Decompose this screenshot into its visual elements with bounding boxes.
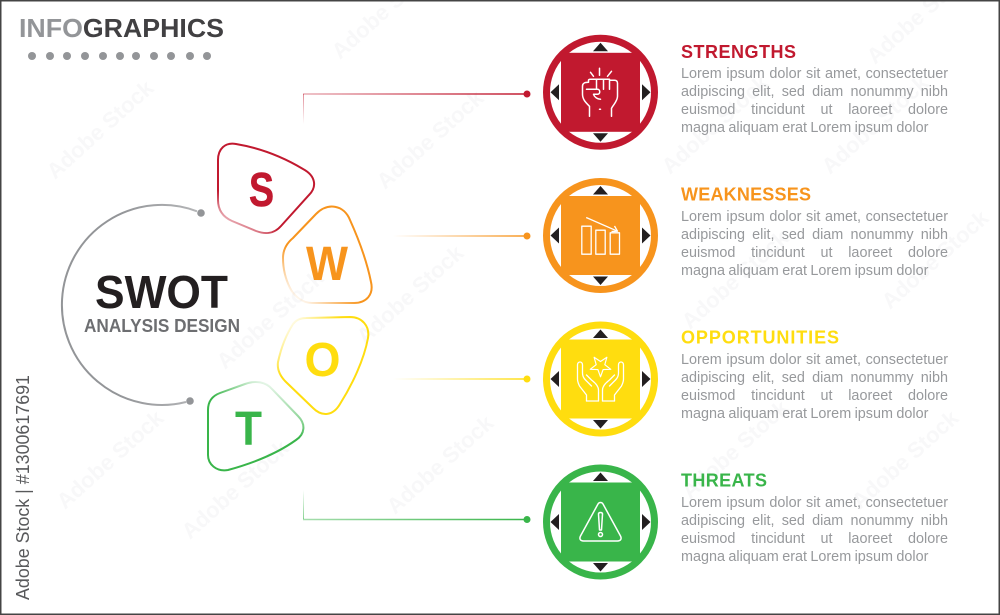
petal: S: [218, 144, 314, 233]
watermark: stock pattern: Adobe Stock: [177, 435, 294, 544]
title: INFOGRAPHICS: [19, 13, 224, 60]
watermark: stock pattern: Adobe Stock: [382, 410, 499, 519]
title dots: [28, 52, 211, 60]
text block: weaknesses: Lorem ipsum dolor sit amet, consectetuer: [681, 209, 948, 225]
subheading: analysis design: ANALYSIS DESIGN: [84, 315, 240, 336]
petal: S: S: [249, 164, 274, 217]
petal: W: W: [306, 238, 349, 291]
petal: T: [208, 382, 303, 470]
watermark: stock pattern: Adobe Stock: [657, 70, 774, 179]
connector: weaknesses: [393, 232, 530, 240]
watermark: stock pattern: Adobe Stock: [817, 70, 934, 179]
icon: falling bar chart: [582, 218, 620, 254]
heading: opportunities: OPPORTUNITIES: [681, 328, 839, 348]
watermark: stock pattern: Adobe Stock: [677, 225, 794, 334]
watermark: stock pattern: Adobe Stock: [352, 240, 469, 349]
watermark: stock pattern: Adobe Stock: [52, 405, 169, 514]
watermark: stock pattern: Adobe Stock: [42, 75, 159, 184]
text block: weaknesses: adipiscing elit, sed diam nonummy nibh: [681, 227, 948, 243]
text block: strengths: euismod tincidunt ut laoreet dolore: [681, 102, 948, 118]
icon: warning triangle: [580, 502, 621, 541]
text block: strengths: adipiscing elit, sed diam nonummy nibh: [681, 84, 948, 100]
badge: weaknesses: [546, 182, 654, 290]
text block: strengths: Lorem ipsum dolor sit amet, consectetuer: [681, 66, 948, 82]
connector: threats: [303, 490, 530, 523]
text block: opportunities: adipiscing elit, sed diam nonummy nibh: [681, 370, 948, 386]
text block: threats: euismod tincidunt ut laoreet dolore: [681, 531, 948, 547]
watermark: stock pattern: Adobe Stock: [372, 85, 489, 194]
heading: strengths: STRENGTHS: [681, 42, 796, 62]
text block: opportunities: [681, 352, 948, 422]
text block: weaknesses: [681, 209, 948, 279]
watermark: stock pattern: Adobe Stock: [847, 405, 964, 514]
badge: threats: [546, 468, 654, 576]
watermark: stock pattern: Adobe Stock: [677, 395, 794, 504]
text block: threats: Lorem ipsum dolor sit amet, consectetuer: [681, 495, 948, 511]
heading: SWOT: SWOT: [95, 266, 228, 318]
text block: strengths: [681, 66, 948, 136]
icon: hands holding star: [578, 357, 624, 401]
icon: raised fist: [582, 68, 618, 116]
petal: T: T: [235, 403, 262, 456]
heading: weaknesses: WEAKNESSES: [681, 184, 811, 204]
badge: strengths: [546, 38, 654, 146]
text block: threats: [681, 495, 948, 565]
badge: opportunities: [546, 325, 654, 433]
connector: strengths: [303, 90, 530, 124]
text block: opportunities: euismod tincidunt ut laoreet dolore: [681, 388, 948, 404]
text block: threats: adipiscing elit, sed diam nonummy nibh: [681, 513, 948, 529]
watermark: stock pattern: Adobe Stock: [212, 265, 329, 374]
text block: threats: magna aliquam erat Lorem ipsum dolor: [681, 549, 928, 565]
connector: opportunities: [393, 376, 530, 382]
text block: weaknesses: euismod tincidunt ut laoreet dolore: [681, 245, 948, 261]
vertical credit: Adobe Stock | #1300617691: [13, 375, 33, 600]
central SWOT arc and label: [62, 205, 240, 405]
text block: strengths: magna aliquam erat Lorem ipsum dolor: [681, 120, 928, 136]
text block: opportunities: magna aliquam erat Lorem ipsum dolor: [681, 406, 928, 422]
title: INFOGRAPHICS: INFOGRAPHICS: [19, 13, 224, 43]
watermark: stock pattern: Adobe Stock: [877, 205, 994, 314]
text block: opportunities: Lorem ipsum dolor sit amet, consectetuer: [681, 352, 948, 368]
petal: O: O: [304, 334, 340, 387]
petal: W: [283, 207, 372, 303]
text block: weaknesses: magna aliquam erat Lorem ipsum dolor: [681, 263, 928, 279]
heading: threats: THREATS: [681, 470, 767, 490]
petal: O: [278, 317, 368, 414]
